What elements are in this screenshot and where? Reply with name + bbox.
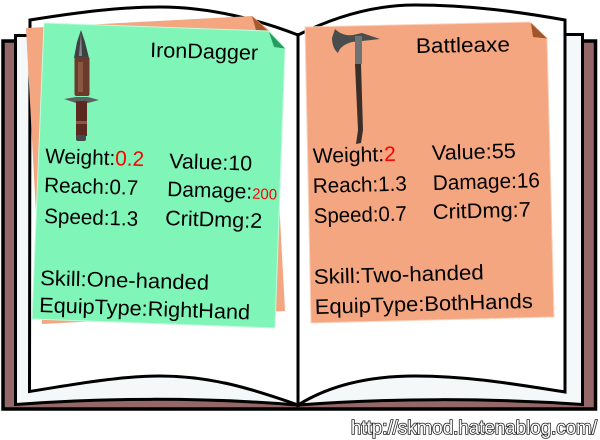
title: IronDagger (150, 39, 258, 65)
page stack left (16, 36, 297, 405)
stats (313, 140, 540, 319)
orange note (305, 22, 554, 323)
panel: iron dagger card (32, 23, 285, 328)
weight: Weight:2 (313, 143, 396, 168)
speed: Speed:0.7 (314, 203, 407, 228)
left page (30, 7, 298, 405)
orange note fold (531, 23, 547, 38)
damage: Damage:200 (167, 178, 278, 204)
weight: Weight:0.2 (45, 145, 145, 171)
value: Value:10 (169, 150, 253, 176)
reach: Reach:0.7 (44, 174, 139, 200)
reach: Reach:1.3 (313, 173, 407, 198)
value: Value:55 (432, 140, 516, 165)
crit damage: CritDmg:7 (433, 198, 531, 224)
icon: battleaxe (332, 29, 380, 144)
skill: Skill:One-handed (40, 267, 209, 295)
website url: http://skmod.hatenablog.com/ (351, 418, 598, 439)
stats (39, 145, 278, 324)
crit damage: CritDmg:2 (165, 207, 263, 233)
page stack right (298, 34, 582, 405)
green note (32, 23, 285, 328)
skill: Skill:Two-handed (313, 261, 484, 289)
equip type: EquipType:RightHand (39, 294, 250, 324)
equip type: EquipType:BothHands (314, 290, 533, 319)
green note fold (269, 32, 285, 48)
title: Battleaxe (416, 33, 510, 58)
back note fold (252, 16, 268, 31)
icon: iron dagger (64, 30, 99, 141)
back orange note (26, 16, 285, 324)
panel: battleaxe card (305, 22, 554, 323)
speed: Speed:1.3 (44, 205, 139, 231)
damage: Damage:16 (433, 169, 540, 195)
right page (298, 5, 565, 405)
